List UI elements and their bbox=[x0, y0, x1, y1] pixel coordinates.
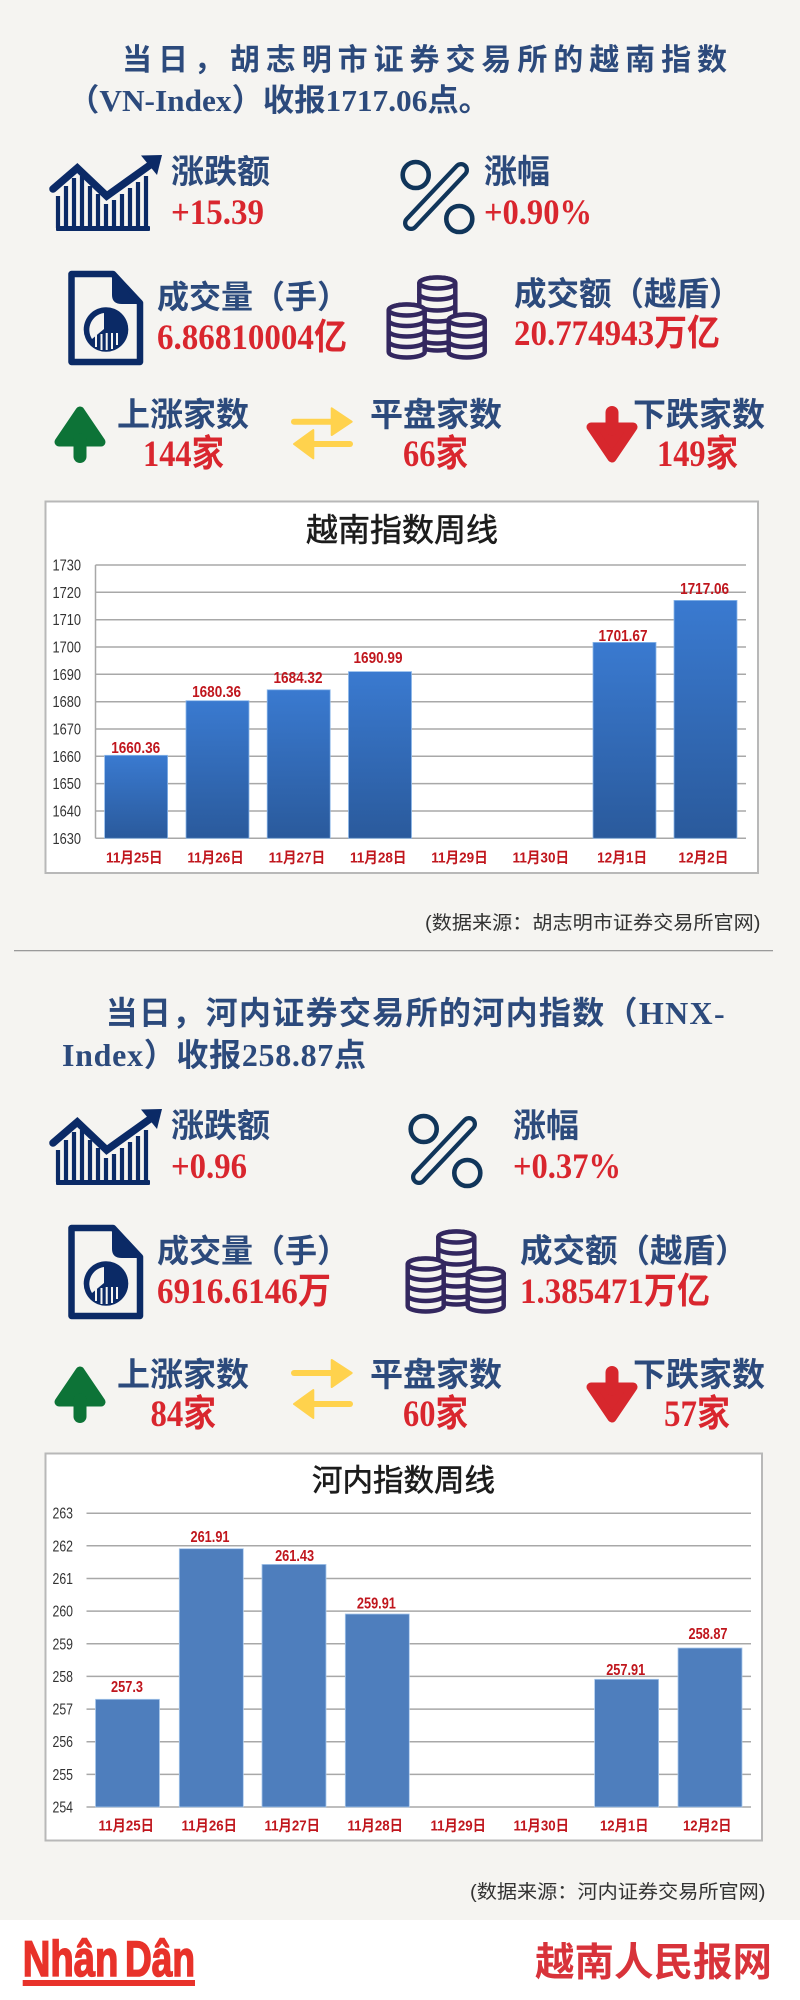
source note: HNX-Index: (数据来源：河内证券交易所官网) bbox=[470, 1881, 766, 1903]
x axis labels: 12月1日 bbox=[597, 850, 647, 866]
heading: HNX-Index close: 当日，河内证券交易所的河内指数（HNX- bbox=[106, 995, 725, 1031]
stat: change amount: 涨跌额 bbox=[171, 1108, 270, 1145]
stat: decliners: 下跌家数 bbox=[633, 397, 765, 434]
y axis labels: 1660 bbox=[52, 749, 81, 766]
stat: advancers: 上涨家数 bbox=[117, 397, 249, 434]
icon: coins bbox=[408, 1232, 504, 1312]
stat: trading volume bbox=[157, 1233, 349, 1311]
logo: Nhan Dan: Dân bbox=[125, 1931, 195, 1987]
stat: change amount bbox=[171, 1108, 270, 1186]
data labels: 1660.36 bbox=[111, 740, 160, 757]
stat: unchanged: 平盘家数 bbox=[370, 1357, 502, 1394]
data labels: 261.43 bbox=[275, 1548, 314, 1565]
stat: trading value bbox=[520, 1233, 748, 1311]
y axis labels: 257 bbox=[52, 1702, 73, 1719]
stat: change percent: 涨幅 bbox=[513, 1108, 579, 1145]
stat: trading value: 成交额（越盾） bbox=[514, 276, 742, 313]
stat: change amount: +15.39 bbox=[171, 192, 264, 232]
data labels bbox=[111, 1529, 728, 1696]
stat: change amount bbox=[171, 154, 270, 232]
y axis labels: 260 bbox=[52, 1604, 73, 1621]
bars bbox=[105, 600, 737, 838]
stat: advancers: 84家 bbox=[150, 1393, 216, 1435]
y axis labels bbox=[52, 1506, 73, 1816]
data labels: 1701.67 bbox=[598, 628, 648, 645]
y axis labels: 1630 bbox=[52, 831, 81, 848]
y axis labels bbox=[52, 558, 81, 848]
stat: advancers bbox=[117, 1357, 249, 1435]
x axis labels: 11月28日 bbox=[347, 1818, 403, 1834]
y axis labels: 1670 bbox=[52, 722, 81, 738]
stat: trading volume: 6.86810004亿 bbox=[157, 317, 347, 357]
stat: trading volume: 成交量（手） bbox=[157, 1233, 349, 1269]
y axis labels: 1730 bbox=[52, 558, 81, 574]
y axis labels: 256 bbox=[52, 1734, 73, 1751]
y axis labels: 261 bbox=[52, 1571, 73, 1588]
panel: HNX-Index weekly bar chart bbox=[46, 1454, 762, 1840]
stat: trading value bbox=[514, 276, 742, 353]
stat: change amount: +0.96 bbox=[171, 1146, 247, 1186]
icon: down arrow bbox=[591, 412, 633, 458]
data labels: 257.91 bbox=[606, 1662, 645, 1679]
icon: percent bbox=[411, 1116, 480, 1186]
x axis labels: 11月29日 bbox=[431, 850, 488, 866]
data labels: 1680.36 bbox=[192, 684, 241, 701]
stat: change percent: +0.37% bbox=[513, 1146, 621, 1186]
section: VN-Index summary bbox=[53, 44, 765, 475]
y axis labels: 1680 bbox=[52, 694, 81, 711]
y axis labels: 1700 bbox=[52, 640, 81, 656]
y axis labels: 1640 bbox=[52, 804, 81, 820]
y axis labels: 1710 bbox=[52, 612, 81, 629]
heading: VN-Index close: 当日，胡志明市证券交易所的越南指数 bbox=[122, 44, 727, 77]
stat: decliners: 57家 bbox=[664, 1393, 730, 1435]
x axis labels: 12月1日 bbox=[600, 1818, 648, 1834]
bars bbox=[96, 1549, 742, 1807]
stat: change percent bbox=[513, 1108, 621, 1186]
source note: VN-Index: (数据来源：胡志明市证券交易所官网) bbox=[425, 912, 760, 934]
x axis labels: 11月30日 bbox=[513, 1818, 569, 1834]
icon: percent bbox=[403, 162, 472, 232]
heading: HNX-Index close bbox=[62, 995, 725, 1073]
stat: decliners: 下跌家数 bbox=[633, 1357, 765, 1394]
stat: unchanged: 平盘家数 bbox=[370, 397, 502, 434]
icon: up arrow bbox=[59, 411, 101, 456]
section: HNX-Index summary bbox=[53, 995, 765, 1435]
icon: exchange arrows bbox=[294, 1360, 352, 1418]
stat: decliners bbox=[633, 397, 765, 475]
stat: trading volume: 6916.6146万 bbox=[157, 1271, 331, 1311]
stat: change percent bbox=[484, 154, 592, 232]
data labels: 1690.99 bbox=[354, 650, 403, 667]
x axis labels: 11月25日 bbox=[106, 850, 163, 866]
x axis labels: 11月26日 bbox=[181, 1818, 237, 1834]
data labels: 257.3 bbox=[111, 1679, 143, 1696]
stat: advancers: 144家 bbox=[143, 433, 224, 475]
data labels: 1684.32 bbox=[274, 670, 323, 687]
icon: rising chart bbox=[53, 1109, 162, 1185]
stat: trading volume bbox=[157, 279, 349, 357]
chart title: 越南指数周线 bbox=[306, 512, 498, 548]
y axis labels: 262 bbox=[52, 1538, 73, 1555]
x axis labels bbox=[106, 850, 728, 866]
stat: advancers bbox=[117, 397, 249, 475]
data labels: 1717.06 bbox=[680, 581, 729, 598]
icon: document with pie chart bbox=[72, 274, 140, 362]
icon: exchange arrows bbox=[294, 408, 352, 458]
stat: unchanged: 66家 bbox=[403, 433, 468, 475]
stat: unchanged bbox=[370, 1357, 502, 1435]
stat: unchanged bbox=[370, 397, 502, 475]
stat: decliners bbox=[633, 1357, 765, 1435]
stat: change percent: 涨幅 bbox=[484, 154, 550, 191]
data labels: 261.91 bbox=[190, 1529, 230, 1546]
x axis labels: 11月26日 bbox=[187, 850, 244, 866]
stat: change percent: +0.90% bbox=[484, 192, 592, 232]
x axis labels: 12月2日 bbox=[678, 850, 728, 866]
stat: change amount: 涨跌额 bbox=[171, 154, 270, 191]
x axis labels: 11月29日 bbox=[430, 1818, 486, 1834]
data labels bbox=[111, 581, 729, 757]
stat: decliners: 149家 bbox=[657, 433, 738, 475]
icon: up arrow bbox=[59, 1371, 101, 1416]
y axis labels: 259 bbox=[52, 1636, 73, 1653]
logo: Chinese masthead: 越南人民报网 bbox=[535, 1941, 772, 1985]
data labels: 259.91 bbox=[357, 1596, 396, 1612]
logo: Nhan Dan: Nhân bbox=[23, 1931, 118, 1987]
icon: down arrow bbox=[591, 1372, 633, 1418]
y axis labels: 255 bbox=[52, 1767, 73, 1784]
icon: rising chart bbox=[53, 155, 162, 231]
x axis labels: 11月25日 bbox=[98, 1818, 154, 1834]
y axis labels: 263 bbox=[52, 1506, 73, 1523]
icon: coins bbox=[389, 278, 485, 358]
y axis labels: 1690 bbox=[52, 667, 81, 684]
x axis labels: 11月30日 bbox=[513, 850, 569, 866]
y axis labels: 254 bbox=[52, 1800, 73, 1816]
x axis labels: 11月27日 bbox=[269, 850, 325, 866]
x axis labels: 12月2日 bbox=[683, 1818, 731, 1834]
x axis labels bbox=[98, 1818, 731, 1834]
panel: VN-Index weekly bar chart bbox=[46, 502, 758, 873]
heading: VN-Index close bbox=[68, 44, 727, 118]
stat: trading volume: 成交量（手） bbox=[157, 279, 349, 315]
stat: advancers: 上涨家数 bbox=[117, 1357, 249, 1394]
heading: VN-Index close: （VN-Index）收报1717.06点。 bbox=[68, 83, 490, 118]
x axis labels: 11月28日 bbox=[350, 850, 406, 866]
y axis labels: 1650 bbox=[52, 776, 81, 793]
stat: unchanged: 60家 bbox=[403, 1393, 468, 1435]
icon: document with pie chart bbox=[72, 1228, 140, 1316]
stat: trading value: 成交额（越盾） bbox=[520, 1233, 748, 1270]
y axis labels: 258 bbox=[52, 1669, 73, 1686]
y axis labels: 1720 bbox=[52, 585, 81, 602]
chart title: 河内指数周线 bbox=[312, 1464, 495, 1498]
heading: HNX-Index close: Index）收报258.87点 bbox=[62, 1037, 366, 1073]
footer band bbox=[0, 1920, 800, 2000]
stat: trading value: 20.774943万亿 bbox=[514, 313, 720, 353]
data labels: 258.87 bbox=[688, 1626, 728, 1643]
stat: trading value: 1.385471万亿 bbox=[520, 1271, 710, 1311]
x axis labels: 11月27日 bbox=[264, 1818, 320, 1834]
